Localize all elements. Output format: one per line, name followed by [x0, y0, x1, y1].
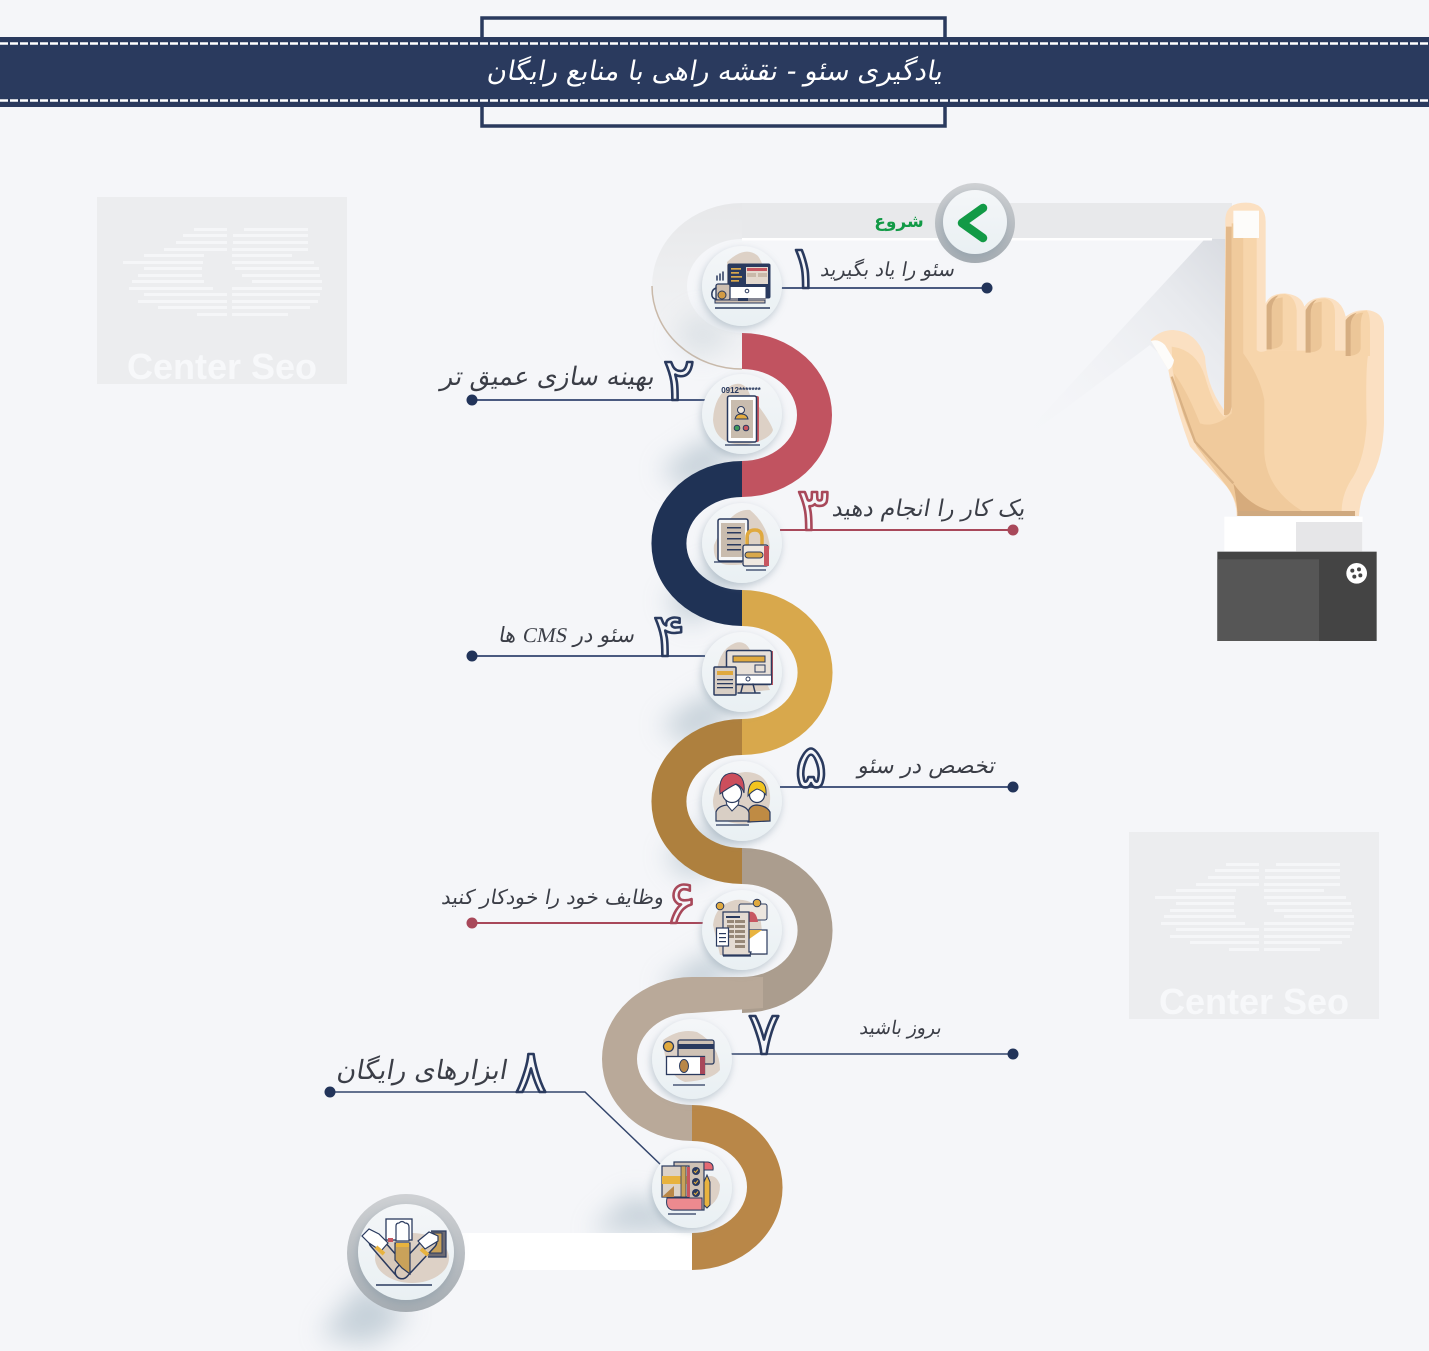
finger 2	[1306, 298, 1335, 353]
watermark: top left logo	[97, 197, 347, 387]
connector line 3	[780, 524, 1018, 536]
watermark: bottom right logo: Center Seo	[1159, 981, 1349, 1022]
number 7: ۷	[748, 999, 780, 1069]
label 1: سئو را یاد بگیرید	[819, 258, 957, 281]
hand illustration	[1151, 203, 1384, 641]
number 4: ۴	[653, 601, 685, 671]
step 5 icon: two people	[702, 761, 782, 841]
hand outer shape	[1151, 203, 1384, 516]
step 2 icon: phone contact: 0912*******	[721, 386, 762, 395]
index finger left edge	[1224, 227, 1232, 415]
step 4 icon: monitor and tablet	[702, 632, 782, 712]
road: red curve	[742, 333, 832, 497]
label 8: ابزارهای رایگان	[335, 1055, 510, 1086]
sleeve button	[1346, 563, 1367, 584]
palm dark side	[1174, 223, 1303, 512]
road: white end strip	[440, 1233, 692, 1270]
jacket sleeve	[1217, 552, 1377, 641]
connector line 8	[324, 1086, 662, 1166]
connector line 1	[780, 282, 992, 294]
finger 3	[1346, 311, 1370, 356]
fingernail index	[1233, 211, 1259, 238]
chevron icon	[962, 208, 983, 238]
hand long shadow	[1010, 214, 1228, 450]
title text: یادگیری سئو - نقشه راهی با منابع رایگان	[485, 55, 946, 87]
connector line 2	[466, 394, 705, 406]
step 3 icon: document and padlock	[702, 503, 782, 583]
step 2 icon: phone contact	[702, 374, 782, 454]
watermark: top left logo: Center Seo	[127, 346, 317, 387]
shirt cuff	[1224, 517, 1363, 551]
soft circle shadows	[320, 435, 738, 1345]
road: light taupe curve	[602, 977, 763, 1141]
road: gold curve	[742, 590, 833, 755]
start button	[935, 183, 1015, 263]
road: bronze curve	[692, 1105, 783, 1270]
step 7 icon: credit card and cash	[652, 1019, 732, 1099]
number 1: ۱	[788, 233, 820, 303]
wrist shadow	[1233, 483, 1273, 512]
number 3: ۳	[797, 475, 829, 545]
title banner	[0, 18, 1429, 126]
label 7: بروز باشید	[858, 1017, 944, 1039]
step 6 icon: spreadsheet and invoice	[702, 890, 782, 970]
shadow on grey segment	[672, 310, 738, 360]
connector line 7	[731, 1048, 1018, 1060]
label 5: تخصص در سئو	[855, 753, 998, 779]
label 6: وظایف خود را خودکار کنید	[440, 885, 666, 909]
start label: شروع	[874, 212, 924, 232]
number 6: ۶	[665, 868, 697, 938]
watermark: bottom right logo	[1129, 832, 1379, 1022]
label 2: بهینه سازی عمیق تر	[437, 362, 658, 392]
fingernail thumb	[1151, 340, 1174, 370]
label 4: سئو در CMS ها	[497, 622, 638, 647]
number 8: ۸	[515, 1037, 547, 1107]
road: navy curve	[651, 461, 742, 626]
step 8 icon: notebook, checklist and pencil	[652, 1148, 732, 1228]
finger 1	[1267, 294, 1297, 351]
palm	[1172, 223, 1370, 512]
step 1 icon: monitor and mug	[702, 246, 782, 326]
thumb edge line	[1172, 377, 1233, 483]
connector line 6	[466, 918, 705, 928]
road: grey start segment	[652, 203, 1232, 369]
road: brown curve	[651, 719, 742, 884]
label 3: یک کار را انجام دهید	[831, 495, 1028, 522]
road: taupe curve	[742, 848, 833, 1013]
connector line 4	[466, 650, 705, 662]
end circle icon: hands	[347, 1194, 465, 1312]
connector line 5	[780, 782, 1018, 792]
number 2: ۲	[663, 345, 695, 415]
number 5: ۵	[795, 732, 827, 802]
